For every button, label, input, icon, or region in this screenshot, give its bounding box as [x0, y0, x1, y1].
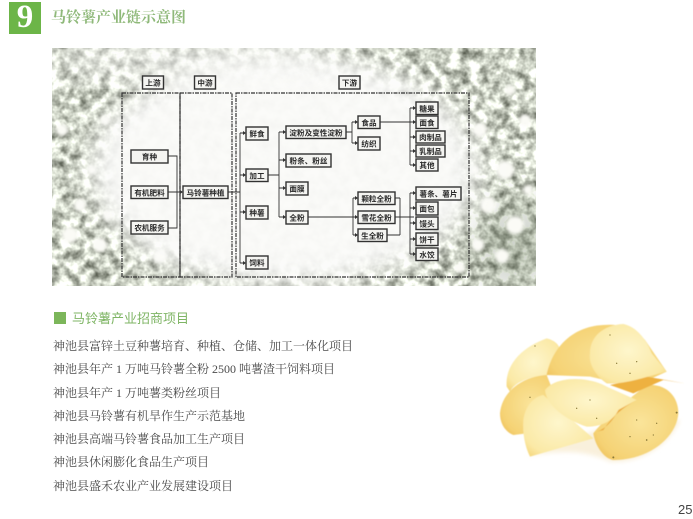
project list: 神池县高端马铃薯食品加工生产项目	[53, 432, 245, 446]
icon: green number badge: 9	[17, 0, 33, 35]
connectors and arrows	[168, 106, 416, 265]
node: 面膜: 面膜	[289, 184, 305, 194]
node: 粉条、粉丝	[286, 154, 331, 167]
node: 农机服务	[131, 221, 168, 234]
node: 雪花全粉	[358, 211, 395, 224]
label: 上游	[142, 76, 164, 89]
node: 育种: 育种	[142, 152, 157, 162]
node: 饲料: 饲料	[249, 258, 265, 268]
node: 糖果	[416, 102, 438, 114]
image: potato chips	[499, 324, 682, 464]
node: 有机肥料	[131, 186, 168, 198]
node: 生全粉	[358, 229, 387, 242]
node: 饼干: 饼干	[419, 234, 435, 244]
icon: green number badge	[9, 2, 41, 34]
pale centre fade	[90, 52, 480, 288]
node: 有机肥料: 有机肥料	[134, 188, 165, 198]
project list: 神池县马铃薯有机旱作生产示范基地	[53, 409, 245, 423]
node: 薯条、薯片: 薯条、薯片	[420, 188, 457, 198]
page number: 25	[678, 502, 692, 517]
node: 雪花全粉: 雪花全粉	[361, 212, 392, 222]
node: 饲料	[246, 256, 268, 269]
project list: 神池县年产 1 万吨马铃薯全粉 2500 吨薯渣干饲料项目	[53, 362, 335, 376]
flower field background photo	[40, 42, 555, 290]
node: 面食	[416, 116, 438, 128]
node: 水饺	[416, 248, 438, 260]
node: 乳制品	[416, 145, 445, 157]
label: 下游	[339, 76, 360, 89]
node: 全粉: 全粉	[289, 212, 305, 222]
node: 食品	[358, 116, 380, 128]
node: 鲜食: 鲜食	[249, 128, 265, 138]
node: 淀粉及变性淀粉	[286, 126, 346, 138]
upstream dashed region	[122, 93, 180, 277]
node: 糖果: 糖果	[419, 104, 435, 114]
node: 粉条、粉丝: 粉条、粉丝	[290, 156, 328, 166]
project list: 神池县盛禾农业产业发展建设项目	[53, 479, 233, 493]
node: 肉制品: 肉制品	[419, 132, 442, 142]
node: 面食: 面食	[419, 118, 435, 128]
label: 上游: 上游	[145, 78, 161, 88]
node: 淀粉及变性淀粉: 淀粉及变性淀粉	[289, 128, 343, 138]
node: 农机服务: 农机服务	[134, 222, 165, 232]
project list: 神池县休闲膨化食品生产项目	[53, 455, 209, 469]
node: 面膜	[286, 182, 308, 195]
node: 生全粉: 生全粉	[361, 230, 384, 240]
darker foliage corners	[475, 200, 555, 290]
title: 马铃薯产业链示意图	[51, 10, 186, 26]
section heading: 马铃薯产业招商项目	[72, 311, 189, 326]
node: 颗粒全粉: 颗粒全粉	[361, 194, 392, 204]
label: 中游	[194, 76, 216, 89]
icon: green section square	[54, 312, 66, 324]
node: 肉制品	[416, 131, 445, 143]
node: 馒头	[416, 217, 438, 230]
node: 食品: 食品	[361, 118, 377, 128]
node: 加工: 加工	[249, 170, 265, 180]
project list	[53, 339, 353, 493]
node: 饼干	[416, 233, 438, 246]
node: 种薯	[246, 206, 268, 219]
project list: 神池县年产 1 万吨薯类粉丝项目	[53, 386, 221, 400]
label: 中游: 中游	[197, 78, 213, 88]
node: 面包: 面包	[419, 204, 435, 214]
node: 纺织: 纺织	[361, 138, 377, 148]
node: 颗粒全粉	[358, 192, 395, 204]
node: 育种	[131, 150, 168, 163]
project list: 神池县富锌土豆种薯培育、种植、仓储、加工一体化项目	[53, 339, 353, 353]
node: 加工	[246, 169, 268, 182]
node: 面包	[416, 202, 438, 215]
node: 水饺: 水饺	[419, 250, 435, 260]
node: 其他	[416, 159, 438, 171]
downstream dashed region	[236, 93, 469, 277]
node: 纺织	[358, 137, 380, 150]
node: 鲜食	[246, 127, 268, 140]
node: 乳制品: 乳制品	[419, 146, 442, 156]
node: 马铃薯种植: 马铃薯种植	[187, 188, 225, 198]
panel: potato industry chain diagram	[52, 48, 536, 286]
node: 马铃薯种植	[183, 186, 228, 198]
node: 全粉	[286, 211, 308, 224]
node: 馒头: 馒头	[419, 218, 435, 228]
midstream dashed region	[180, 93, 232, 277]
node: 其他: 其他	[419, 160, 435, 170]
node: 薯条、薯片	[416, 187, 461, 200]
label: 下游: 下游	[342, 78, 357, 88]
node: 种薯: 种薯	[249, 208, 265, 218]
